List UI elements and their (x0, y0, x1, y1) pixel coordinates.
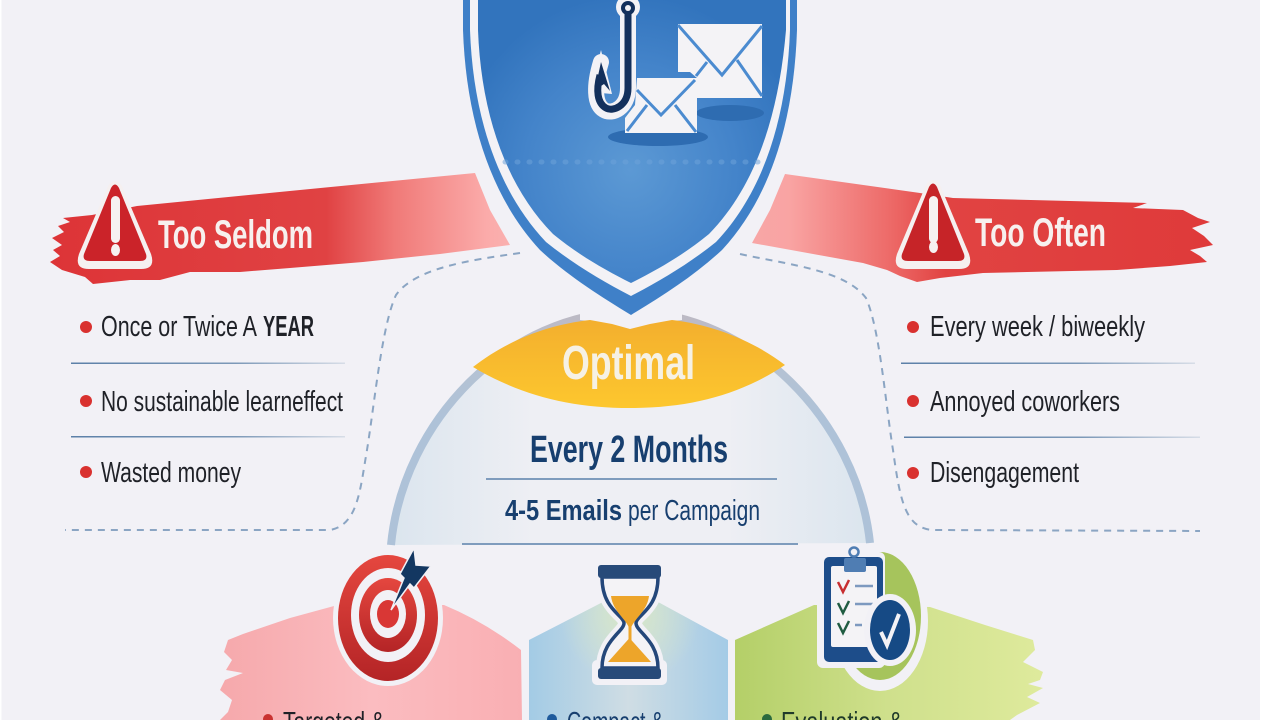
text: every week / biweekly: Every week / biweekly (930, 311, 1145, 343)
text: every 2 months: Every 2 Months (530, 429, 728, 471)
icon: target (333, 548, 443, 686)
icon: fish hook (590, 0, 640, 112)
panel: optimal arch (391, 304, 870, 545)
panel: compact (529, 560, 728, 720)
heading: too seldom: Too Seldom (158, 213, 313, 257)
icon: warning triangle left (78, 181, 152, 269)
bullet text: evaluation (762, 706, 903, 720)
icon: warning triangle right (896, 180, 970, 269)
heading: optimal: Optimal (562, 337, 695, 390)
text: once or twice a: Once or Twice A (101, 311, 257, 343)
icon: hourglass (592, 560, 667, 685)
heading: too often: Too Often (975, 211, 1106, 255)
icon: clipboard (817, 548, 928, 691)
panel: evaluation (735, 548, 1043, 720)
banner: too often (752, 174, 1213, 282)
icon: small envelope (608, 78, 708, 146)
text: annoyed coworkers: Annoyed coworkers (930, 386, 1120, 418)
text: 4-5 emails: 4-5 Emails (505, 495, 622, 527)
dashed connector left (65, 253, 520, 530)
yellow optimal band (473, 320, 785, 408)
icon: large envelope (678, 24, 764, 121)
shield (456, 0, 804, 322)
bullet text: targeted (263, 706, 385, 720)
list: too seldom (71, 311, 345, 489)
text: no sustainable learneffect: No sustainable learneffect (101, 386, 343, 418)
text: per campaign: per Campaign (628, 495, 760, 527)
text: disengagement: Disengagement (930, 457, 1079, 489)
text: wasted money: Wasted money (101, 457, 241, 489)
text: year: YEAR (263, 311, 314, 343)
bullet text: compact (547, 706, 664, 720)
dashed connector right (740, 254, 1200, 531)
list: too often (901, 311, 1200, 489)
panel: targeted (220, 548, 522, 720)
banner: too seldom (50, 173, 510, 284)
